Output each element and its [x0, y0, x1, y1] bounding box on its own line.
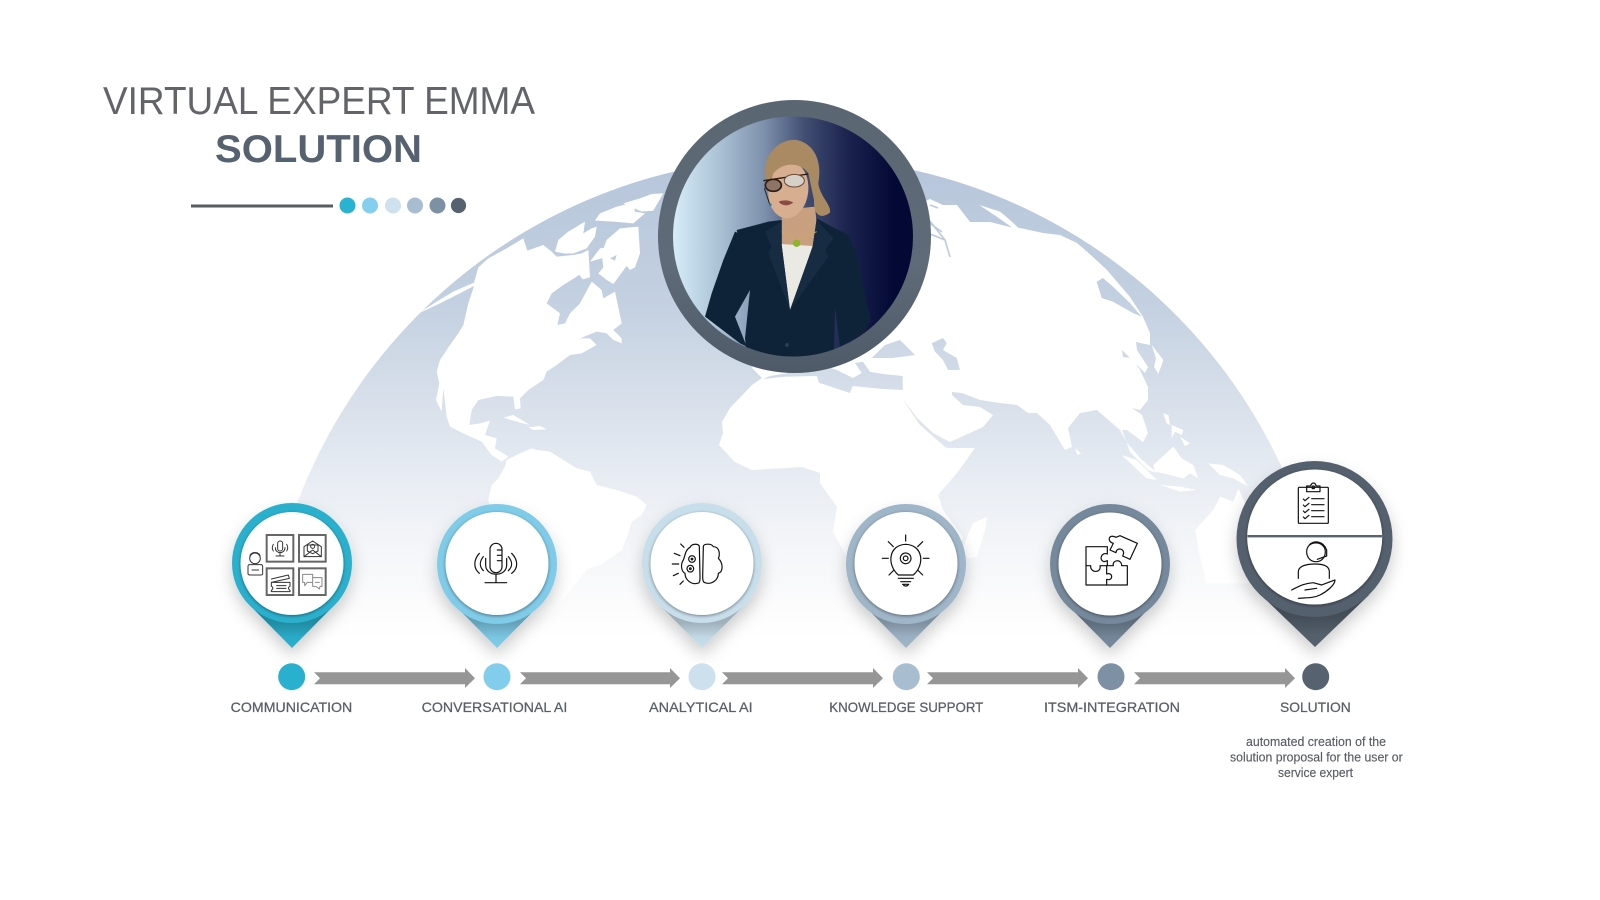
south america — [488, 448, 646, 570]
title — [103, 80, 535, 171]
icon: checklist clipboard — [1298, 483, 1328, 523]
divider — [1248, 535, 1382, 537]
portrait background — [673, 116, 913, 356]
step labels: ANALYTICAL AI — [649, 699, 753, 715]
icon: puzzle pieces — [1086, 536, 1137, 585]
step labels: ITSM-INTEGRATION — [1044, 699, 1180, 715]
title line 2: SOLUTION — [215, 128, 422, 171]
pin face — [1058, 512, 1162, 616]
icon: communication channels — [248, 535, 326, 595]
pin face — [446, 512, 548, 615]
pin face — [240, 512, 344, 615]
pin 5: ITSM integration — [1050, 504, 1170, 648]
pin body — [1050, 504, 1170, 648]
islands of asia pacific — [979, 205, 1190, 446]
pin 6: solution — [1236, 461, 1392, 647]
timeline dots — [278, 663, 1329, 690]
title rule with colour dots — [191, 198, 466, 214]
solution description: solution proposal for the user or — [1230, 750, 1403, 764]
pin body — [437, 504, 557, 648]
solution description — [1230, 735, 1403, 780]
title line 1: VIRTUAL EXPERT EMMA — [103, 80, 535, 123]
icon: brain with gears — [672, 544, 722, 584]
step labels: COMMUNICATION — [231, 699, 352, 715]
icon: microphone — [475, 543, 517, 583]
north america — [417, 193, 663, 462]
solution description: service expert — [1278, 766, 1354, 780]
step labels: CONVERSATIONAL AI — [422, 699, 567, 715]
solution description: automated creation of the — [1246, 735, 1386, 749]
pin face — [1247, 470, 1382, 604]
pin body — [1236, 461, 1392, 647]
africa and eurasia — [719, 199, 1156, 555]
pin 1: communication — [232, 503, 352, 648]
avatar portrait: Emma — [658, 100, 931, 373]
pin body — [846, 504, 966, 648]
icon: light bulb with gear — [882, 535, 929, 586]
pin face — [854, 512, 958, 615]
icon: agent with headset over hand — [1292, 542, 1335, 598]
pin 3: analytical AI — [642, 503, 762, 648]
pin 2: conversational AI — [437, 504, 557, 648]
step labels: KNOWLEDGE SUPPORT — [829, 699, 984, 715]
step labels — [231, 699, 1351, 715]
world map globe — [298, 170, 1282, 570]
seas over eurasia — [763, 278, 1142, 393]
pin 4: knowledge support — [846, 504, 966, 648]
step labels: SOLUTION — [1280, 699, 1351, 715]
pin body — [232, 503, 352, 648]
timeline arrows — [314, 668, 1295, 688]
pin face — [650, 512, 754, 615]
portrait ring — [658, 100, 931, 373]
pin body — [642, 503, 762, 648]
